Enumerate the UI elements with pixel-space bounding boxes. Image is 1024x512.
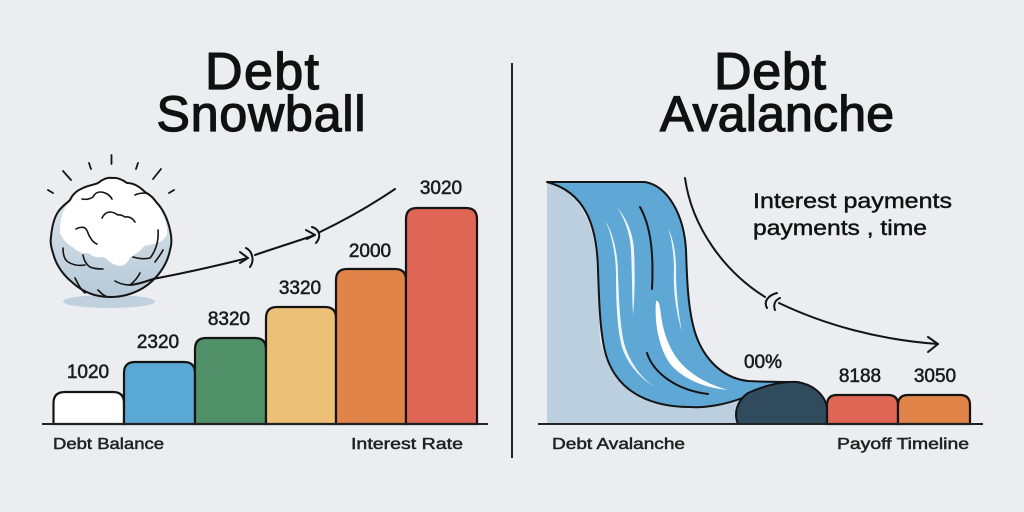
- baseline: [42, 423, 488, 425]
- water dark strokes: [640, 207, 708, 394]
- bar 1020: [54, 392, 124, 424]
- title: Debt Snowball: Snowball: [156, 86, 366, 142]
- bars: avalanche: 3050: [914, 366, 956, 387]
- water highlights: [605, 207, 682, 388]
- snow cap: [60, 176, 167, 266]
- value labels: 2000: [349, 241, 391, 262]
- value labels: 3320: [279, 278, 321, 299]
- title: Debt Snowball: Debt: [205, 43, 320, 101]
- arrow: interest decline curve: [685, 178, 938, 352]
- center divider: [511, 63, 513, 458]
- avalanche baseline: [538, 423, 983, 425]
- text block: interest payments: payments , time: [753, 216, 927, 240]
- bars: avalanche: [827, 366, 970, 424]
- text block: interest payments: Interest payments: [753, 189, 952, 213]
- icon: snowball: [48, 155, 174, 308]
- value labels: 8188: [839, 366, 881, 387]
- illustration: avalanche: [547, 182, 827, 424]
- bar 3320: [266, 307, 336, 424]
- bar 3050: [898, 395, 970, 424]
- value labels: 3020: [420, 178, 462, 199]
- snow creases: [63, 192, 163, 297]
- sparkle lines: [48, 155, 174, 193]
- label: Debt Balance: Debt Balance: [53, 436, 164, 453]
- text block: interest payments: [753, 189, 952, 240]
- dark rock: [736, 382, 827, 424]
- value labels: 2320: [137, 332, 179, 353]
- water flow: [547, 182, 795, 407]
- large highlight: [656, 301, 728, 390]
- bar 8320: [195, 338, 266, 424]
- arrow: snowball growth curve: [130, 189, 395, 285]
- value labels: 8320: [208, 309, 250, 330]
- bar 2320: [124, 362, 195, 424]
- label: Payoff Timeline: Payoff Timeline: [837, 436, 969, 453]
- title: Debt Avalanche: Debt: [714, 43, 827, 101]
- bar 3020: [406, 208, 477, 424]
- bar 2000: [336, 269, 406, 424]
- title: Debt Avalanche: [660, 43, 894, 142]
- hill: [547, 182, 742, 424]
- bar chart: snowball: [42, 178, 488, 424]
- ball body: [51, 178, 172, 297]
- title: Debt Avalanche: Avalanche: [660, 86, 894, 142]
- label: Debt Avalanche: Debt Avalanche: [552, 436, 685, 453]
- title: Debt Snowball: [156, 43, 366, 142]
- value labels: [67, 178, 462, 383]
- ball outline: [51, 178, 172, 297]
- infographic canvas: [42, 50, 983, 458]
- label: Interest Rate: Interest Rate: [351, 436, 463, 453]
- ball shadow: [63, 295, 155, 308]
- value labels: 1020: [67, 362, 109, 383]
- value: 00%: 00%: [744, 352, 782, 373]
- bar 8188: [827, 395, 898, 424]
